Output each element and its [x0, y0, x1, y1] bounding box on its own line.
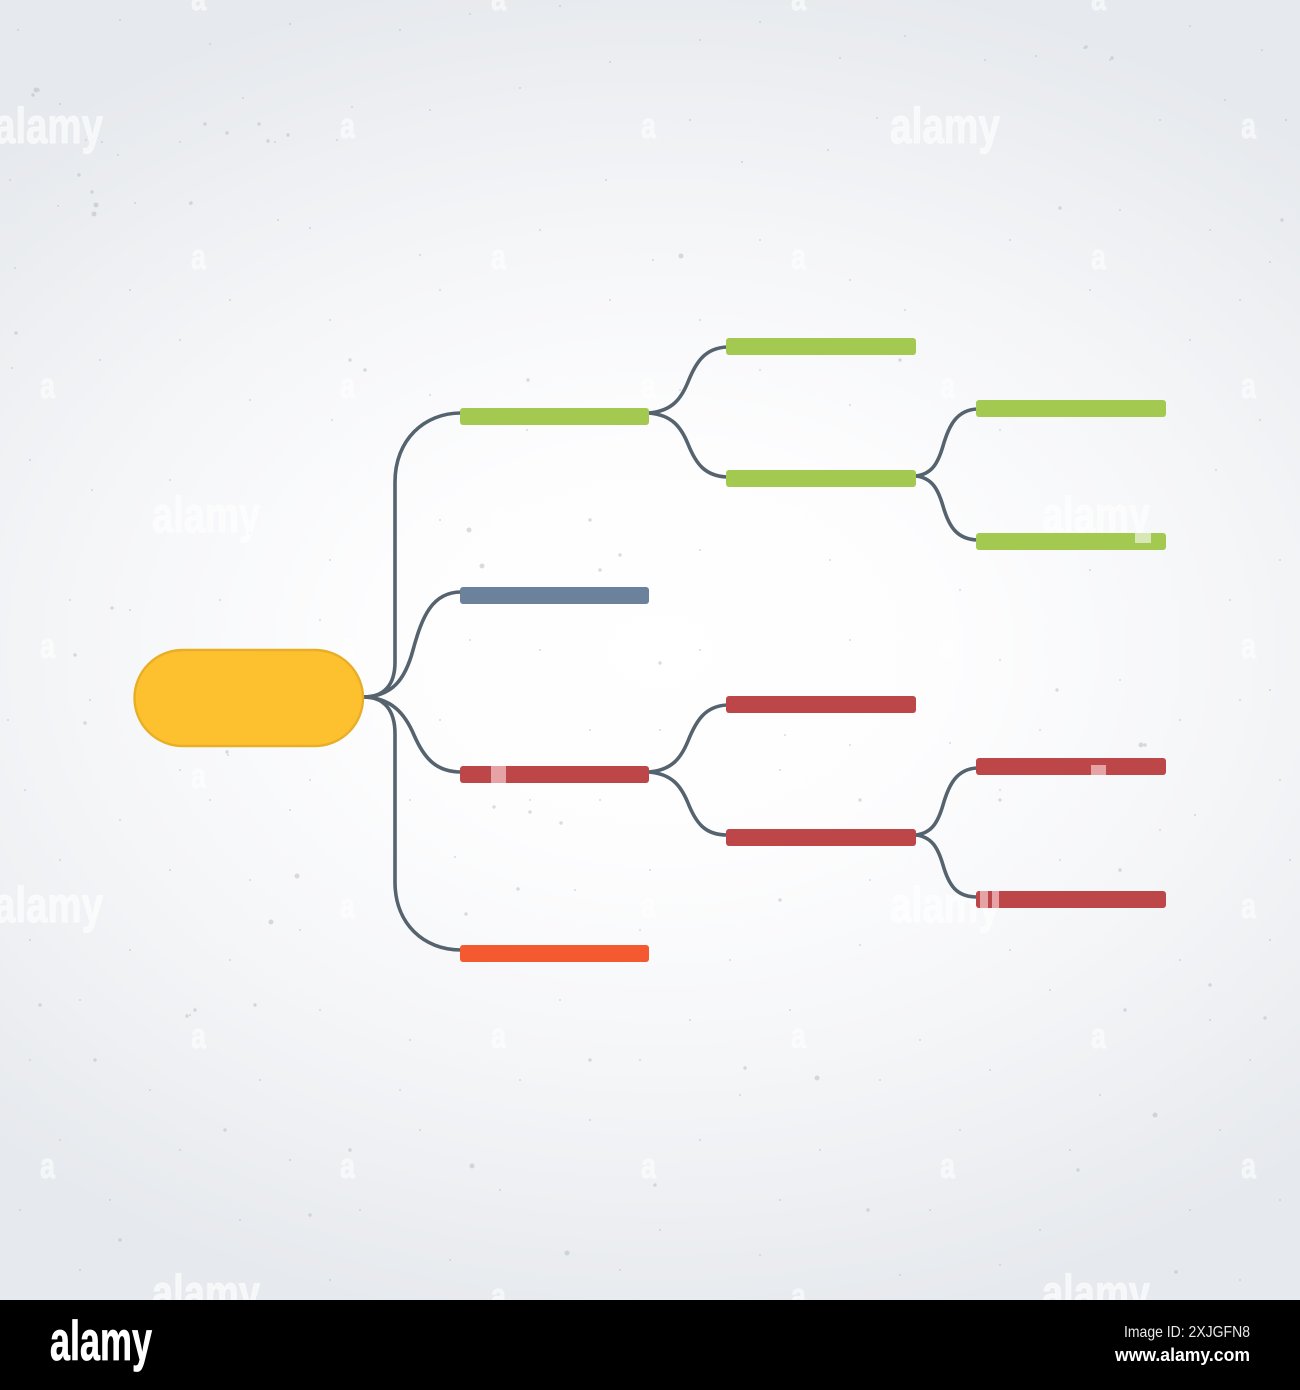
watermark fragments over bars: [491, 533, 1151, 908]
footer logo: alamy: [50, 1309, 152, 1372]
footer image id: Image ID: 2XJGFN8: [1124, 1324, 1250, 1341]
watermark: alamy repeated: a: [340, 625, 356, 666]
watermark: alamy repeated: a: [1241, 1145, 1257, 1186]
footer bar: [0, 1300, 1300, 1390]
watermark: alamy repeated: a: [191, 755, 207, 796]
watermark: alamy repeated: a: [1241, 365, 1257, 406]
connectors: green branch: [649, 347, 977, 540]
watermark: alamy repeated: a: [491, 236, 507, 277]
watermark: alamy repeated: a: [1091, 236, 1107, 277]
central node: yellow pill: [134, 650, 363, 746]
branch bar: green upper level 2: [726, 338, 916, 355]
watermark: alamy repeated: a: [791, 236, 807, 277]
branch bar: red lower level 3: [976, 891, 1166, 908]
branch bar: red upper level 3: [976, 758, 1166, 775]
branch bar: red level 1: [460, 766, 649, 783]
watermark: alamy repeated: a: [40, 365, 56, 406]
watermark: alamy repeated: a: [641, 625, 657, 666]
watermark: alamy repeated: a: [40, 625, 56, 666]
watermark: alamy repeated: a: [1241, 625, 1257, 666]
watermark: alamy repeated: a: [641, 365, 657, 406]
watermark: alamy repeated: a: [340, 1145, 356, 1186]
branch bar: red upper level 2: [726, 696, 916, 713]
watermark: alamy repeated: a: [791, 1015, 807, 1056]
watermark: alamy repeated: a: [940, 625, 956, 666]
branch bar: green upper level 3: [976, 400, 1166, 417]
watermark: alamy repeated: a: [1241, 105, 1257, 146]
watermark: alamy repeated: a: [791, 755, 807, 796]
watermark: alamy repeated: a: [191, 236, 207, 277]
watermark: alamy repeated: a: [641, 1145, 657, 1186]
watermark: alamy repeated: a: [791, 1275, 807, 1316]
watermark: alamy repeated: alamy: [890, 98, 1000, 154]
watermark: alamy repeated: alamy: [1042, 487, 1150, 543]
branch bar: red lower level 2: [726, 829, 916, 846]
watermark: alamy repeated: a: [1241, 885, 1257, 926]
watermark: alamy repeated: a: [1091, 1015, 1107, 1056]
watermark: alamy repeated: a: [491, 1015, 507, 1056]
connectors: central node to first-level branches: [364, 413, 461, 950]
watermark: alamy repeated: a: [340, 365, 356, 406]
watermark: alamy repeated: a: [641, 105, 657, 146]
watermark: alamy repeated: alamy: [152, 1265, 260, 1321]
watermark: alamy repeated: a: [791, 495, 807, 536]
watermark: alamy repeated: a: [191, 1015, 207, 1056]
watermark: alamy repeated: alamy: [890, 877, 1000, 933]
footer website: www.alamy.com: [1114, 1345, 1250, 1365]
branch bar: orange level 1: [460, 945, 649, 962]
watermark: alamy repeated: a: [940, 365, 956, 406]
branch bar: green lower level 2: [726, 470, 916, 487]
watermark: alamy repeated: a: [340, 885, 356, 926]
watermark: alamy repeated: a: [940, 1145, 956, 1186]
watermark: alamy repeated: a: [491, 1275, 507, 1316]
watermark: alamy repeated: a: [491, 495, 507, 536]
branch bar: blue level 1: [460, 587, 649, 604]
branch bar: green lower level 3: [976, 533, 1166, 550]
watermark: alamy repeated: alamy: [1042, 1265, 1150, 1321]
watermark: alamy repeated: a: [40, 1145, 56, 1186]
watermark: alamy repeated: a: [340, 105, 356, 146]
branch bar: green level 1: [460, 408, 649, 425]
watermark: alamy repeated: alamy: [152, 487, 260, 543]
watermark: alamy repeated: a: [641, 885, 657, 926]
connectors: red branch: [649, 705, 977, 897]
